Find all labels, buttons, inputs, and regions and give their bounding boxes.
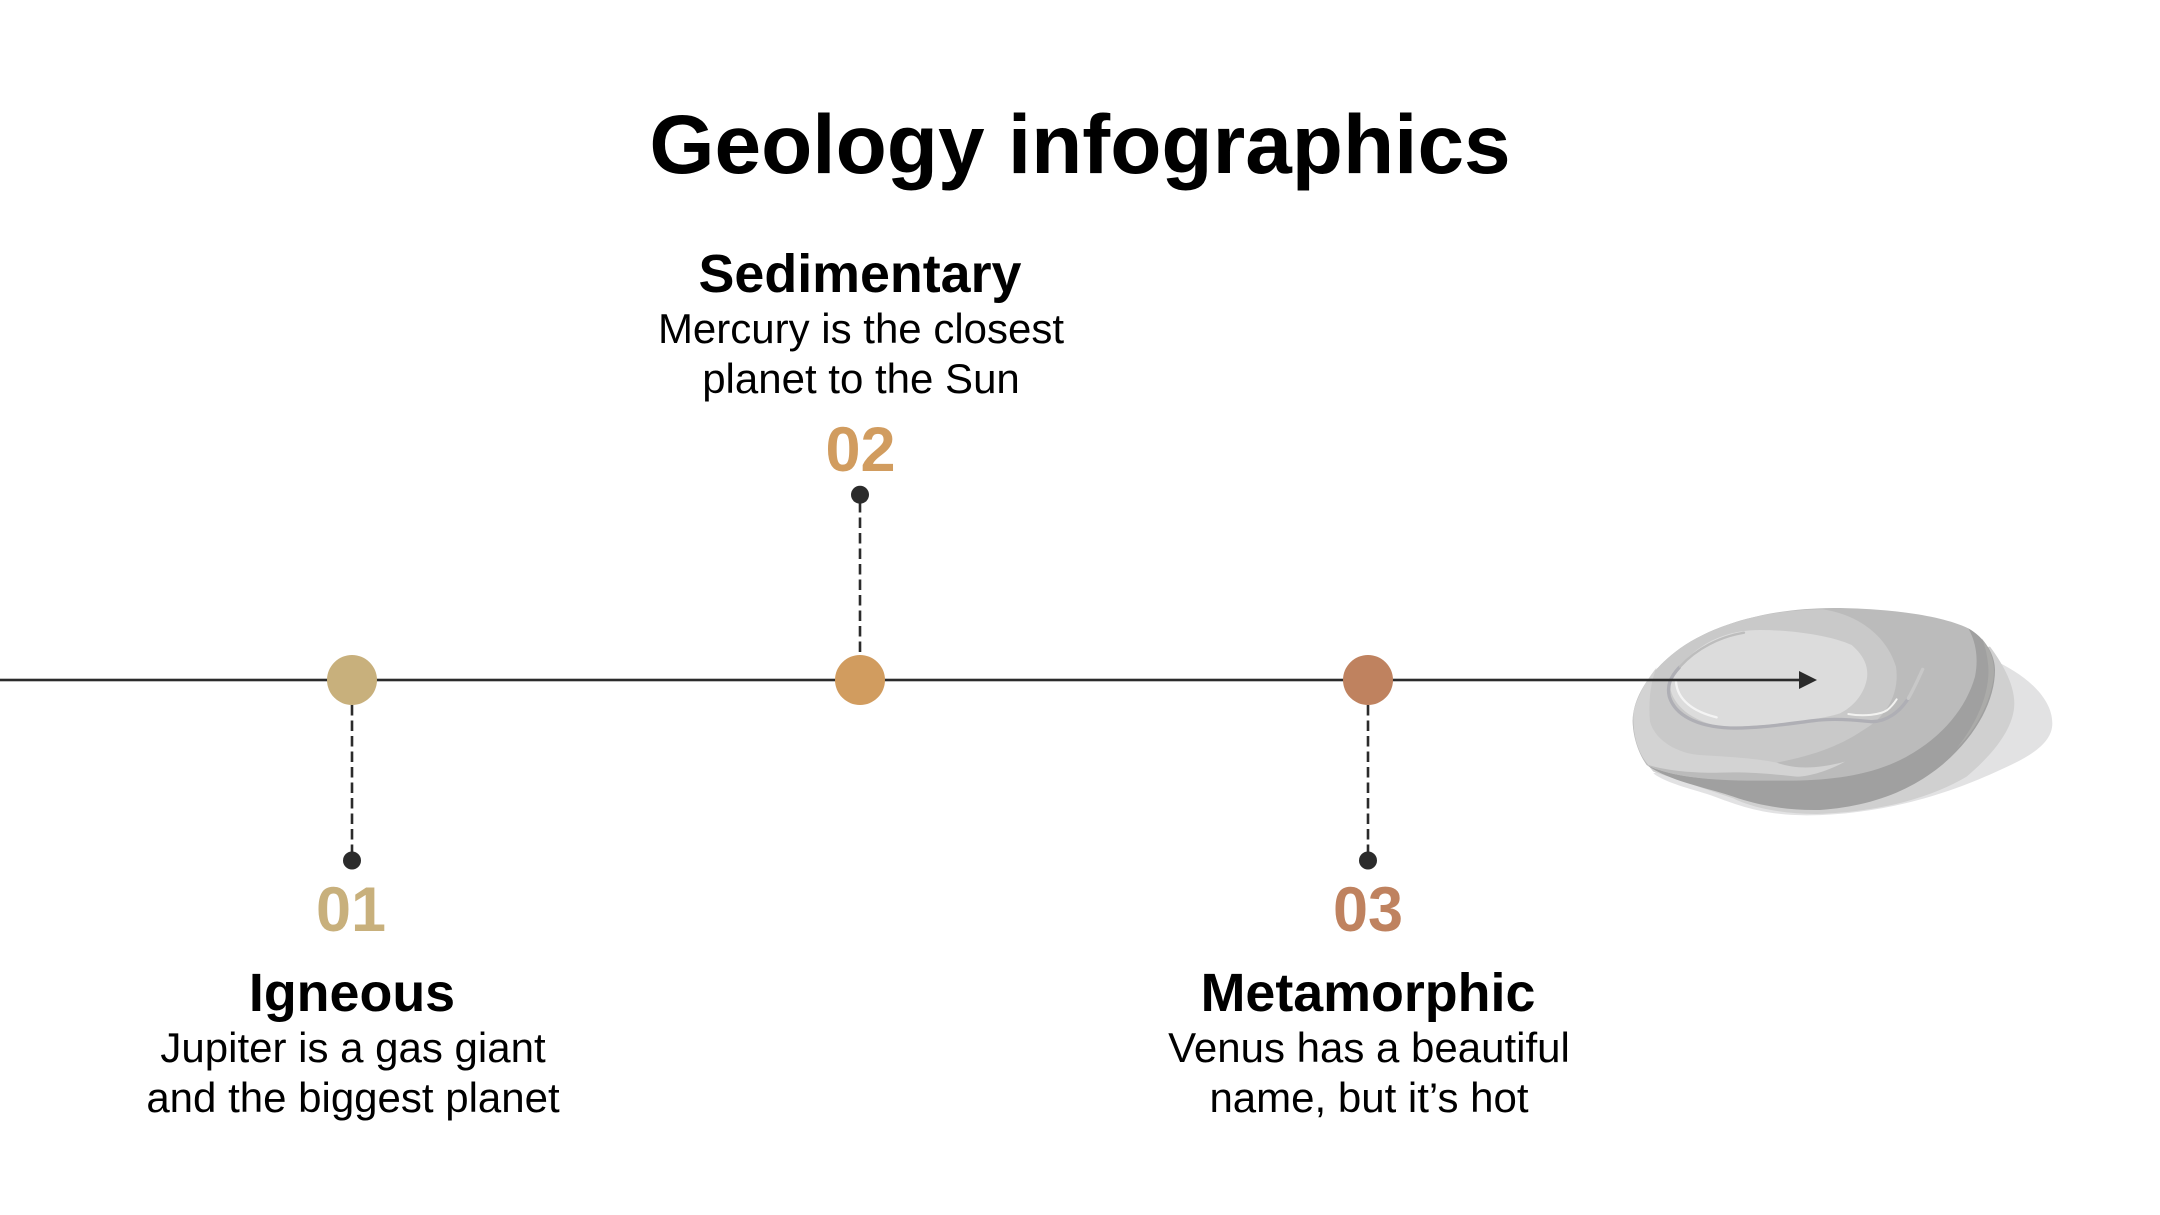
heading: Igneous: Igneous [249, 963, 455, 1023]
text: Metamorphic description: Venus has a beautiful [1168, 1024, 1570, 1071]
text: Igneous description [146, 1024, 560, 1121]
title: Geology infographics [649, 97, 1511, 191]
marker 02 [835, 486, 885, 705]
item: Metamorphic [1168, 963, 1570, 1121]
text: Sedimentary description: Mercury is the closest [658, 304, 1064, 352]
text: Igneous description: and the biggest planet [146, 1074, 560, 1121]
text: Sedimentary description [658, 304, 1064, 402]
text: Sedimentary description: planet to the Sun [702, 355, 1020, 402]
number 03: 03 [1333, 875, 1403, 945]
number 02: 02 [825, 415, 896, 485]
item: Sedimentary [658, 244, 1064, 402]
marker 01 [327, 655, 377, 870]
number 01: 01 [316, 875, 386, 945]
text: Metamorphic description [1168, 1024, 1570, 1121]
marker 03 [1343, 655, 1393, 870]
heading: Metamorphic: Metamorphic [1201, 963, 1535, 1023]
item: Igneous [146, 963, 560, 1121]
heading: Sedimentary: Sedimentary [699, 244, 1021, 304]
text: Metamorphic description: name, but it’s hot [1209, 1074, 1529, 1121]
text: Igneous description: Jupiter is a gas giant [160, 1024, 546, 1071]
